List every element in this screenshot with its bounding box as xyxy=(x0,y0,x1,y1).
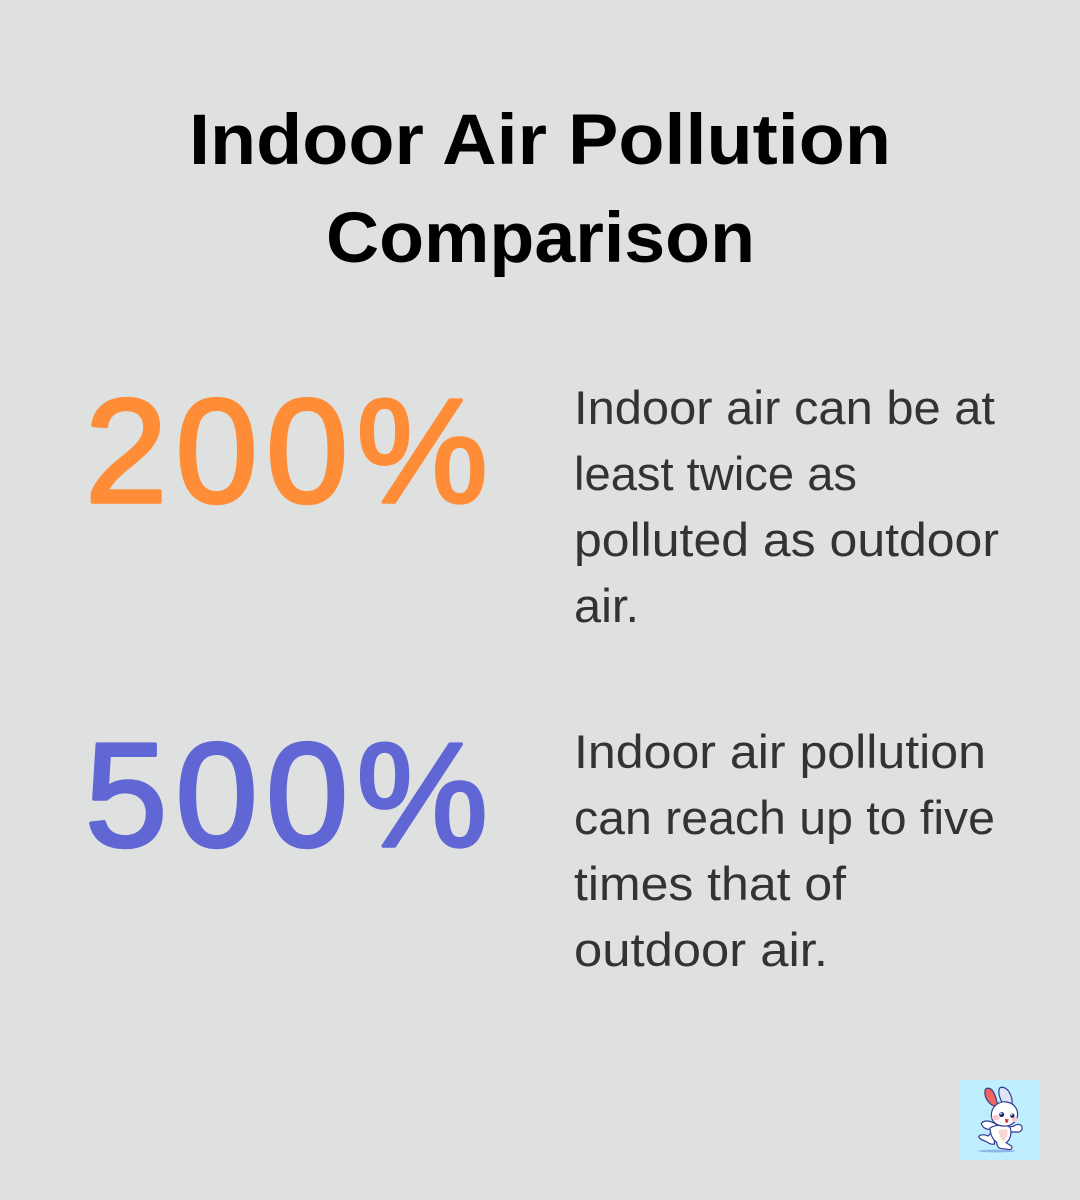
text block: 200% description: least twice as xyxy=(574,447,857,500)
text block: 500% description: Indoor air pollution xyxy=(574,725,986,778)
text block: 200% description xyxy=(574,381,999,632)
text block: 200% description: polluted as outdoor xyxy=(574,513,999,566)
title: Indoor Air Pollution xyxy=(189,101,891,180)
text block: 500% description: can reach up to five xyxy=(574,791,995,844)
icon: rabbit logo xyxy=(960,1080,1040,1160)
text block: 500% description: outdoor air. xyxy=(574,923,828,976)
panel: 500% statistic xyxy=(85,713,995,976)
number: 200%: 200% xyxy=(85,369,488,534)
number: 500%: 500% xyxy=(85,713,488,878)
text block: 500% description xyxy=(574,725,995,976)
text block: 200% description: Indoor air can be at xyxy=(574,381,995,434)
title xyxy=(189,101,891,278)
text block: 200% description: air. xyxy=(574,579,639,632)
title: Comparison xyxy=(326,199,755,278)
text block: 500% description: times that of xyxy=(574,857,847,910)
panel: 200% statistic xyxy=(85,369,999,632)
